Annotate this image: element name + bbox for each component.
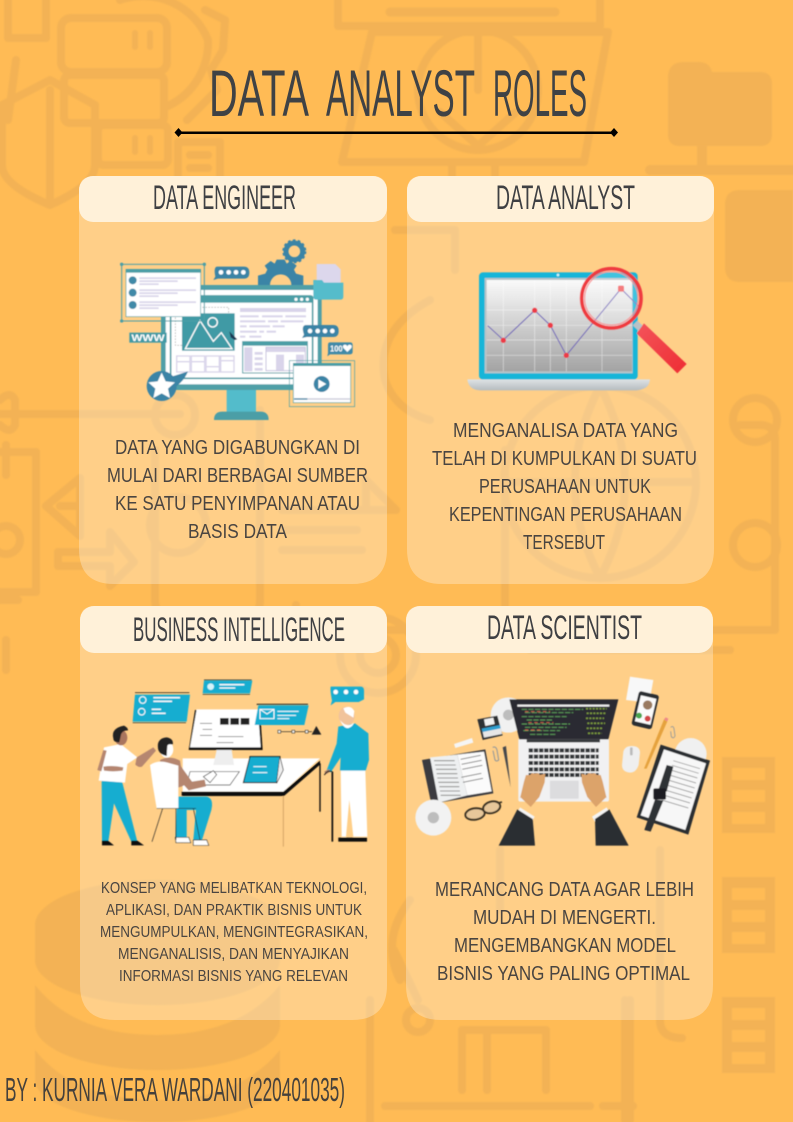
chair: [150, 762, 178, 808]
illustration: monitor dashboard: WWW: [131, 333, 165, 343]
description: [435, 879, 694, 985]
panel: business intelligence: [80, 606, 387, 1020]
hands: [520, 773, 545, 807]
description: MERANCANG DATA AGAR LEBIH: [435, 879, 694, 901]
panel: data engineer: [79, 176, 387, 584]
description: KONSEP YANG MELIBATKAN TEKNOLOGI,: [101, 880, 367, 897]
description: APLIKASI, DAN PRAKTIK BISNIS UNTUK: [106, 902, 362, 919]
heading: DATA ANALYST: [496, 179, 635, 217]
panel: data scientist: [406, 606, 713, 1020]
mouse: [622, 746, 640, 773]
title: [209, 56, 587, 130]
title underline: [174, 128, 618, 137]
note and phone: [626, 677, 653, 703]
pen and clip: [503, 746, 511, 787]
illustration: laptop with magnifier over line chart: [467, 269, 687, 390]
laptop: [518, 738, 609, 802]
wrist watch: [658, 765, 673, 792]
background server stacks and folder: [668, 62, 793, 1073]
CD right and clipboard: [675, 738, 707, 770]
heading: DATA ENGINEER: [153, 179, 296, 217]
heading bar: [406, 606, 713, 653]
title: ANALYST: [326, 56, 475, 130]
floating cards: [133, 695, 190, 722]
description: TERSEBUT: [523, 532, 605, 554]
illustration: monitor dashboard: 100: [330, 344, 343, 353]
panel background: [406, 606, 713, 1020]
panel background: [80, 606, 387, 1020]
description: KE SATU PENYIMPANAN ATAU: [115, 493, 360, 515]
CD bottom: [415, 800, 451, 836]
description: [100, 880, 368, 985]
glasses: [465, 800, 502, 821]
description: PERUSAHAAN UNTUK: [479, 476, 652, 498]
illustration: overhead desk with laptop: [415, 677, 710, 846]
description: INFORMASI BISNIS YANG RELEVAN: [119, 968, 348, 985]
description: DATA YANG DIGABUNGKAN DI: [115, 437, 360, 459]
description: MENGANALISIS, DAN MENYAJIKAN: [118, 946, 349, 963]
description: KEPENTINGAN PERUSAHAAN: [449, 504, 682, 526]
tablet: [243, 757, 280, 783]
heading: DATA SCIENTIST: [487, 609, 642, 647]
description: BISNIS YANG PALING OPTIMAL: [437, 963, 690, 985]
panel: data analyst: [407, 176, 714, 584]
notebook: [422, 749, 493, 804]
seated person: [160, 758, 184, 788]
heading bar: [79, 176, 387, 222]
old man: [330, 687, 364, 705]
panel background: [79, 176, 387, 584]
illustration: monitor dashboard: [120, 240, 355, 420]
description: MUDAH DI MENGERTI.: [473, 907, 656, 929]
description: BASIS DATA: [188, 521, 288, 543]
desk: [183, 758, 320, 792]
pencil: [644, 719, 667, 769]
heading bar: [407, 176, 714, 222]
background database icon: [35, 880, 280, 1122]
description: MENGEMBANGKAN MODEL: [454, 935, 676, 957]
floppy: [477, 716, 503, 740]
description: [432, 420, 697, 554]
description: [107, 437, 368, 543]
heading bar: [80, 606, 387, 653]
footer author credit: BY : KURNIA VERA WARDANI (220401035): [5, 1071, 345, 1108]
title: DATA: [209, 56, 309, 130]
USB: [454, 738, 473, 748]
description: MULAI DARI BERBAGAI SUMBER: [107, 465, 368, 487]
description: MENGANALISA DATA YANG: [453, 420, 678, 442]
CD top: [491, 697, 526, 733]
panel: business intelligence: BUSINESS INTELLIGENCE: [133, 611, 345, 649]
description: MENGUMPULKAN, MENGINTEGRASIKAN,: [100, 924, 368, 941]
standing person left: [102, 780, 137, 842]
panel background: [407, 176, 714, 584]
infographic page: ROLES: [493, 56, 587, 130]
illustration: team around a desk: [97, 680, 369, 847]
description: TELAH DI KUMPULKAN DI SUATU: [432, 448, 697, 470]
